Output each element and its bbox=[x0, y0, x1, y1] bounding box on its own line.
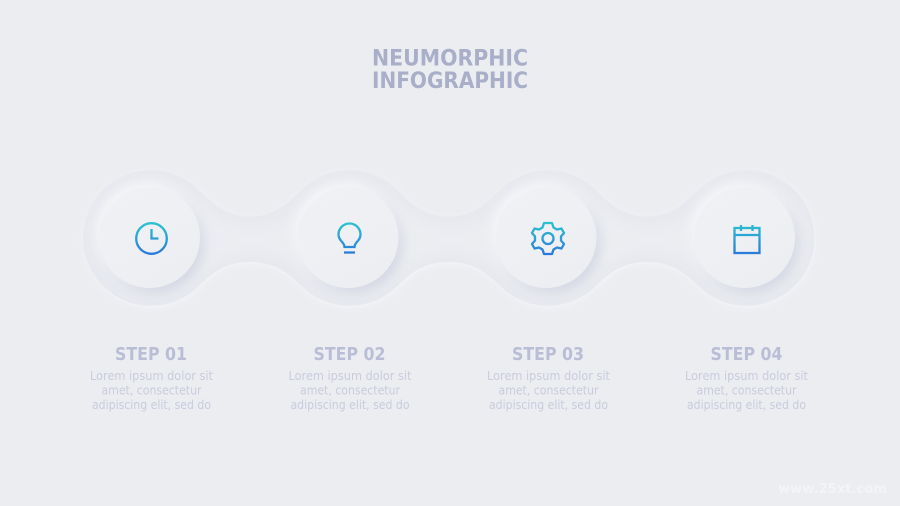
icon: calendar bbox=[734, 225, 760, 253]
title: INFOGRAPHIC bbox=[372, 69, 528, 94]
step 4 text: amet, consectetur bbox=[696, 384, 797, 398]
step 4 text: Lorem ipsum dolor sit bbox=[685, 369, 808, 383]
step 1 text bbox=[90, 344, 213, 412]
step 4 text bbox=[685, 344, 808, 412]
step 2 text: adipiscing elit, sed do bbox=[290, 398, 410, 412]
step 1 text: adipiscing elit, sed do bbox=[92, 398, 211, 412]
step 2 text: Lorem ipsum dolor sit bbox=[288, 369, 412, 383]
step 2 text: STEP 02 bbox=[314, 344, 386, 365]
step 3 text: STEP 03 bbox=[512, 344, 584, 365]
step 2 button bbox=[296, 184, 402, 292]
step 1 text: amet, consectetur bbox=[102, 384, 202, 398]
step 2 text: amet, consectetur bbox=[300, 384, 400, 398]
watermark: www.25xt.com bbox=[778, 482, 887, 497]
step 3 text bbox=[487, 344, 610, 412]
icon: light bulb bbox=[338, 224, 360, 252]
step 4 text: STEP 04 bbox=[710, 344, 782, 365]
connected neumorphic track bbox=[83, 170, 817, 308]
title: NEUMORPHIC bbox=[372, 46, 528, 72]
step 3 text: amet, consectetur bbox=[498, 384, 599, 398]
step 1 text: Lorem ipsum dolor sit bbox=[90, 369, 213, 383]
step 2 text bbox=[288, 344, 412, 412]
step 4 button bbox=[692, 184, 798, 292]
title bbox=[372, 46, 528, 94]
step 3 text: Lorem ipsum dolor sit bbox=[487, 369, 610, 383]
icon: gear bbox=[532, 223, 564, 254]
step 4 text: adipiscing elit, sed do bbox=[687, 398, 806, 412]
icon: clock bbox=[136, 223, 167, 254]
step 3 text: adipiscing elit, sed do bbox=[489, 398, 608, 412]
step 1 button bbox=[97, 184, 203, 292]
step 1 text: STEP 01 bbox=[115, 344, 187, 365]
step 3 button bbox=[494, 184, 600, 292]
